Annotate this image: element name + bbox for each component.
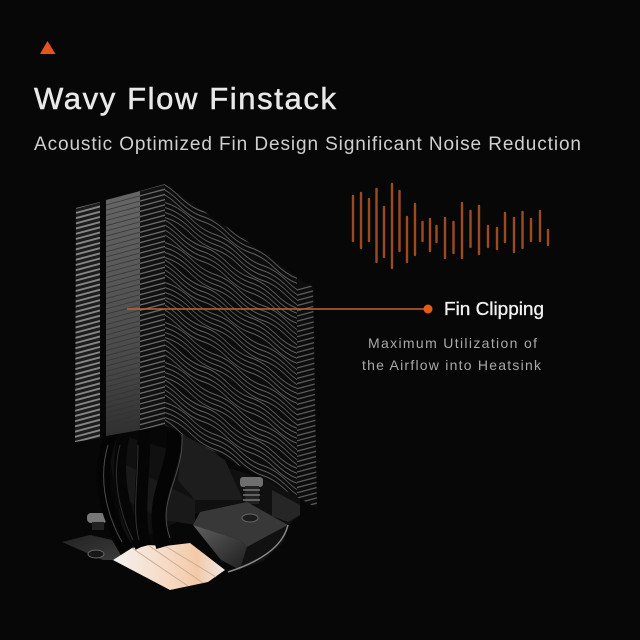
right mounting block: [193, 502, 288, 572]
callout text: Maximum Utilization of: [368, 335, 537, 351]
spring screw: [240, 477, 263, 504]
copper base plate: [113, 543, 225, 590]
fin stack: left outer fins: [75, 202, 100, 442]
left screw: [87, 513, 107, 558]
left mounting plate: [62, 535, 122, 560]
inner gray block: [178, 432, 243, 500]
leader line: [127, 304, 432, 314]
callout text: the Airflow into Heatsink: [362, 357, 542, 373]
right bracket: [272, 490, 300, 522]
title: Wavy Flow Finstack: [34, 81, 336, 116]
icon: orange triangle: [40, 41, 56, 54]
fin stack: dark inner band: [140, 184, 165, 430]
heatpipes: [103, 430, 182, 549]
subtitle: Acoustic Optimized Fin Design Significant Noise Reduction: [34, 134, 581, 155]
callout text: [362, 335, 542, 373]
cooler rear frame: [105, 430, 300, 545]
inner dark plate: [120, 462, 195, 525]
fin stack: lit center band: [106, 191, 140, 436]
fin stack: right end fins: [297, 286, 317, 508]
chart: sound waveform: [353, 184, 548, 268]
callout heading: Fin Clipping: [444, 299, 544, 319]
fin stack: right wavy face: [165, 184, 297, 496]
illustration: CPU cooler: [62, 184, 317, 590]
